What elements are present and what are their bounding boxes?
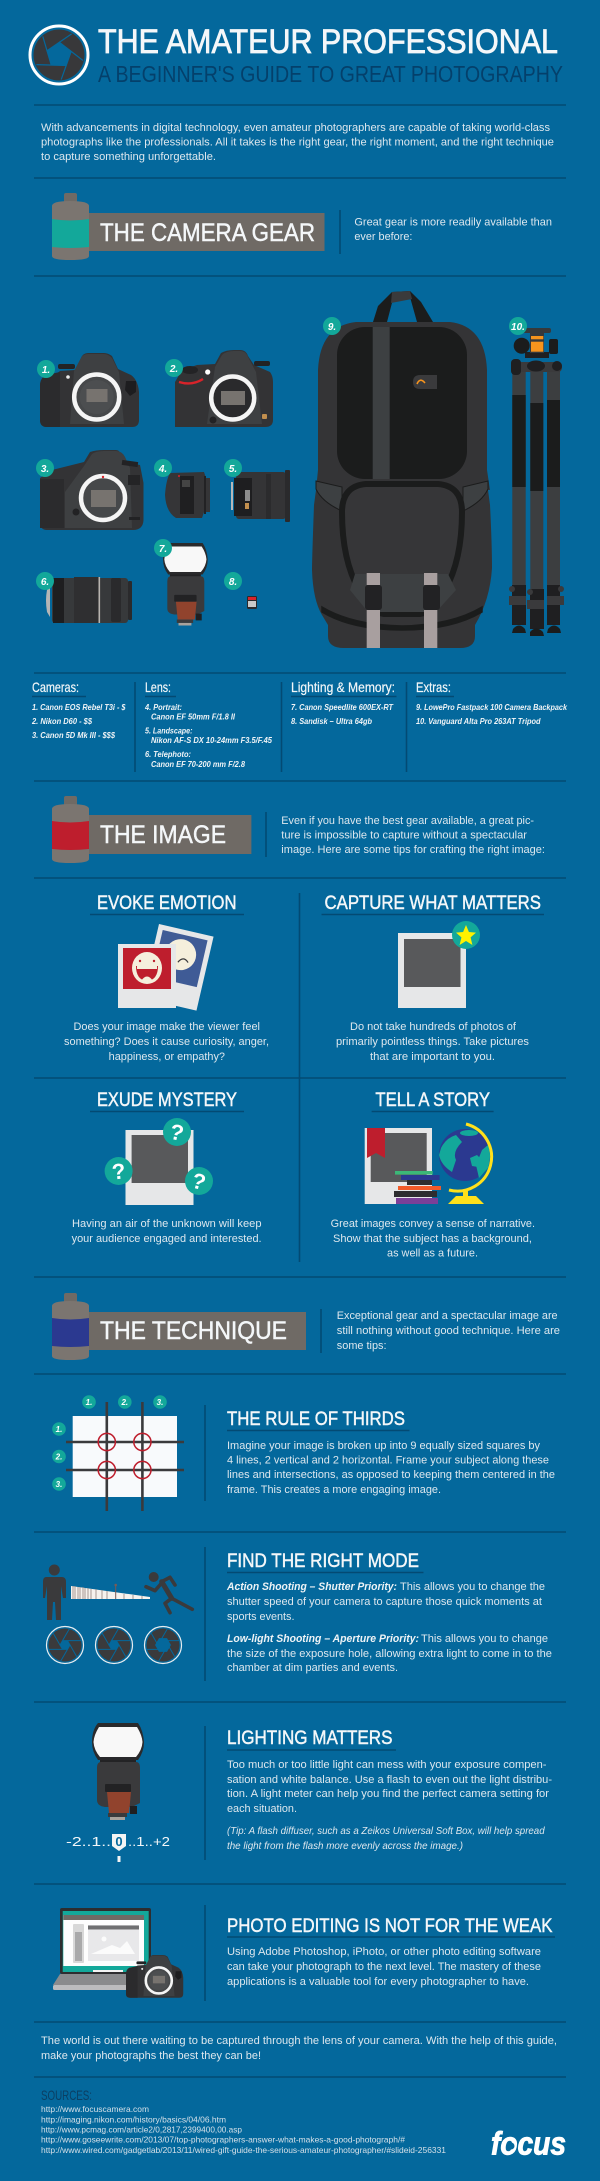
exposure scale: ..1..+2 xyxy=(128,1834,170,1849)
gear list: lens: 5. Landscape: xyxy=(145,726,193,736)
banner: the technique xyxy=(88,1312,306,1350)
intro text xyxy=(41,122,554,163)
gear list: lens: 6. Telephoto: xyxy=(145,750,191,759)
exposure scale: 0 xyxy=(115,1834,123,1849)
section description xyxy=(354,216,552,243)
tripod 10 xyxy=(509,328,564,636)
text block: lighting matters: each situation. xyxy=(227,1803,297,1815)
tripod legs xyxy=(512,362,560,594)
icon: laptop and camera xyxy=(53,1908,183,1998)
focus logo: focus xyxy=(491,2126,566,2162)
icon: polaroid with question marks: ? xyxy=(168,1119,186,1146)
icon: polaroid, books and globe xyxy=(365,1124,492,1204)
gear list: lens: Canon EF 50mm F/1.8 II xyxy=(151,712,236,722)
section description: image. Here are some tips for crafting the right image: xyxy=(281,844,545,856)
text block: find the right mode: sports events. xyxy=(227,1611,294,1623)
text block: lighting matters: tion. A light meter can help you find the perfect camera setting for xyxy=(227,1788,549,1800)
text block: photo editing xyxy=(227,1915,555,1988)
chart: rule of thirds grid: 1. xyxy=(86,1398,92,1407)
sources: http://imaging.nikon.com/history/basics/04/06.htm xyxy=(41,2116,226,2124)
text block: lighting matters: sation and white balance. Use a flash to even out the light distribu- xyxy=(227,1774,552,1786)
camera 3 xyxy=(40,450,144,530)
panel: tell a story xyxy=(331,1089,535,1260)
intro text: With advancements in digital technology, even amateur photographers are capable of taking world-class xyxy=(41,122,550,134)
sources: http://www.goseewrite.com/2013/07/top-photographers-answer-what-makes-a-good-photograph/# xyxy=(41,2136,405,2145)
backpack logo tag xyxy=(413,375,437,389)
heading: CAPTURE WHAT MATTERS xyxy=(324,892,541,914)
gear list: extras: Extras: xyxy=(416,679,451,695)
gear list: lens: Lens: xyxy=(145,679,171,695)
section header: the image xyxy=(52,796,545,863)
gear list: lighting and memory: Lighting & Memory: xyxy=(291,679,395,695)
heading: the camera gear: THE CAMERA GEAR xyxy=(100,219,315,247)
gear list: extras: 10. Vanguard Alta Pro 263AT Tripod xyxy=(416,717,542,726)
icon: polaroid with question marks xyxy=(105,1118,213,1205)
banner: the image xyxy=(88,815,251,854)
icon: laptop xyxy=(53,1908,151,1990)
heading: EXUDE MYSTERY xyxy=(97,1089,237,1111)
section description: ever before: xyxy=(354,231,412,243)
heading: the image: THE IMAGE xyxy=(100,821,226,849)
text block: lighting matters: the light from the flash more evenly across the image.) xyxy=(227,1841,463,1852)
text block: find the right mode: shutter speed of your camera to capture those quick moments at xyxy=(227,1596,542,1608)
gear number badges: 4. xyxy=(158,464,167,475)
banner: the camera gear xyxy=(88,213,324,251)
icon: shutter priority figures xyxy=(43,1564,192,1664)
gear list: lighting and memory xyxy=(291,679,396,726)
text block: the rule of thirds: frame. This creates a more engaging image. xyxy=(227,1484,441,1496)
gear list: lens: Nikon AF-S DX 10-24mm F3.5/F.45 xyxy=(151,736,273,745)
description: as well as a future. xyxy=(387,1248,478,1260)
icon: flash with exposure scale xyxy=(66,1723,170,1862)
section description: ture is impossible to capture without a spectacular xyxy=(281,830,527,842)
text block: the rule of thirds: 4 lines, 2 vertical and 2 horizontal. Frame your subject along these xyxy=(227,1454,549,1466)
section description: Even if you have the best gear available, a great pic- xyxy=(281,815,534,827)
gear list: extras: 9. LowePro Fastpack 100 Camera Backpack xyxy=(416,703,567,712)
icon: polaroid with question marks: ? xyxy=(189,1168,209,1195)
gear list: extras xyxy=(416,679,567,726)
gear list: lens: Canon EF 70-200 mm F/2.8 xyxy=(151,760,246,769)
lens 6 xyxy=(46,577,132,623)
description: that are important to you. xyxy=(370,1051,495,1063)
backpack grey panel xyxy=(350,574,456,612)
gear list: cameras: 1. Canon EOS Rebel T3i - $ xyxy=(32,703,126,712)
chart: rule of thirds grid xyxy=(52,1395,184,1511)
sources: http://www.wired.com/gadgetlab/2013/11/wired-gift-guide-the-serious-amateur-photographer/#slideid-256331 xyxy=(41,2146,446,2155)
icon: polaroid with question marks: ? xyxy=(111,1158,127,1185)
chart: rule of thirds grid: 2. xyxy=(55,1452,62,1462)
sources xyxy=(41,2087,446,2155)
gear list: lens: 4. Portrait: xyxy=(144,703,182,712)
description: happiness, or empathy? xyxy=(109,1051,225,1063)
panel: exude mystery xyxy=(72,1089,262,1245)
section description xyxy=(337,1310,560,1352)
text block: the rule of thirds xyxy=(227,1408,555,1496)
gear list: cameras: Cameras: xyxy=(32,679,79,695)
lens 4 xyxy=(165,472,210,518)
camera 2 xyxy=(175,350,273,427)
icon: aperture 1 xyxy=(46,1626,84,1664)
gear number badges: 10. xyxy=(511,322,525,333)
backpack buckles and straps xyxy=(365,573,440,648)
exposure scale: -2..1.. xyxy=(66,1834,111,1849)
sources: http://www.focuscamera.com xyxy=(41,2105,149,2114)
gear list: lighting and memory: 7. Canon Speedlite 600EX-RT xyxy=(291,703,394,712)
backpack front flap xyxy=(342,484,462,614)
section header: the technique xyxy=(52,1293,560,1360)
text block: find the right mode: Action Shooting – Shutter Priority: xyxy=(226,1581,397,1593)
text block: find the right mode: This allows you to change xyxy=(421,1633,548,1645)
icon: polaroid with star xyxy=(398,921,480,1008)
description: Great images convey a sense of narrative. xyxy=(331,1218,535,1230)
heading: the technique: THE TECHNIQUE xyxy=(100,1317,287,1345)
heading: EVOKE EMOTION xyxy=(97,892,236,914)
icon: aperture 3 xyxy=(144,1626,182,1664)
text block: find the right mode: Low-light Shooting – Aperture Priority: xyxy=(227,1633,419,1645)
text block: the rule of thirds: Imagine your image is broken up into 9 equally sized squares by xyxy=(227,1440,541,1452)
description: Show that the subject has a background, xyxy=(333,1233,532,1245)
icon: flash xyxy=(92,1723,144,1820)
closing text xyxy=(41,2035,557,2062)
icon: film canister teal xyxy=(52,193,89,260)
section description: still nothing without good technique. Here are xyxy=(337,1325,560,1337)
backpack black panel xyxy=(337,327,467,479)
backpack handle xyxy=(373,291,433,322)
backpack lower body xyxy=(312,478,492,648)
section description: Great gear is more readily available than xyxy=(354,216,552,228)
text block: find the right mode: chamber at dim parties and events. xyxy=(227,1662,398,1674)
text block: find the right mode: the size of the exposure hole, allowing extra light to come in to the xyxy=(227,1648,552,1660)
gear list: lighting and memory: 8. Sandisk – Ultra 64gb xyxy=(291,717,372,726)
gear list: cameras xyxy=(31,679,126,740)
text block: find the right mode: FIND THE RIGHT MODE xyxy=(227,1550,419,1572)
intro text: to capture something unforgettable. xyxy=(41,151,216,163)
chart: rule of thirds grid: 3. xyxy=(157,1398,163,1407)
section description: Exceptional gear and a spectacular image are xyxy=(337,1310,558,1322)
icon: standing person xyxy=(43,1564,66,1620)
backpack strap xyxy=(373,327,390,479)
chart: shutter speed wedge xyxy=(71,1584,150,1599)
backpack 9 xyxy=(312,291,492,648)
flash 7 xyxy=(163,543,208,626)
text block: lighting matters xyxy=(227,1727,552,1852)
tripod feet xyxy=(509,585,564,636)
memory card 8 xyxy=(247,596,257,609)
text block: photo editing: PHOTO EDITING IS NOT FOR THE WEAK xyxy=(227,1915,552,1937)
text block: find the right mode xyxy=(226,1550,552,1674)
gear list: lens xyxy=(144,679,273,769)
icon: aperture logo xyxy=(30,26,88,84)
gear number badges: 8. xyxy=(229,577,237,588)
text block: lighting matters: LIGHTING MATTERS xyxy=(227,1727,392,1749)
description: Do not take hundreds of photos of xyxy=(350,1021,516,1033)
text block: find the right mode: This allows you to change the xyxy=(400,1581,545,1593)
description: Having an air of the unknown will keep xyxy=(72,1218,262,1230)
tripod head xyxy=(511,328,562,397)
backpack upper body xyxy=(316,322,490,490)
icon: film canister red xyxy=(52,796,89,863)
description: your audience engaged and interested. xyxy=(72,1233,262,1245)
text block: lighting matters: Too much or too little light can mess with your exposure compen- xyxy=(227,1759,547,1771)
gear list: cameras: 3. Canon 5D Mk III - $$$ xyxy=(32,731,116,740)
panel: evoke emotion xyxy=(64,892,269,1063)
text block: photo editing: applications is a valuable tool for every photographer to have. xyxy=(227,1976,529,1988)
gear number badges: 9. xyxy=(328,322,336,333)
section header: the camera gear xyxy=(52,193,552,260)
section description: some tips: xyxy=(337,1340,386,1352)
gear number badges: 5. xyxy=(229,464,237,475)
panel: capture what matters xyxy=(322,892,544,1063)
gear number badges: 6. xyxy=(41,577,49,588)
sources: SOURCES: xyxy=(41,2087,92,2103)
text block: lighting matters: (Tip: A flash diffuser, such as a Zeikos Universal Soft Box, will help spread xyxy=(227,1826,546,1837)
icon: small camera xyxy=(126,1955,183,1998)
description xyxy=(64,1021,269,1063)
sources: http://www.pcmag.com/article2/0,2817,2399400,00.asp xyxy=(41,2126,242,2135)
title: THE AMATEUR PROFESSIONAL xyxy=(98,23,558,61)
description xyxy=(336,1021,529,1063)
icon: running person xyxy=(146,1572,192,1613)
description: something? Does it cause curiosity, anger, xyxy=(64,1036,269,1048)
text block: the rule of thirds: THE RULE OF THIRDS xyxy=(227,1408,405,1430)
closing text: The world is out there waiting to be captured through the lens of your camera. With the help of this guide, xyxy=(41,2035,557,2047)
gear number badges: 3. xyxy=(41,464,49,475)
gear number badges: 1. xyxy=(42,365,50,376)
backpack side straps xyxy=(316,481,342,511)
description: primarily pointless things. Take pictures xyxy=(336,1036,529,1048)
closing text: make your photographs the best they can be! xyxy=(41,2050,261,2062)
gear number badges: 7. xyxy=(159,544,167,555)
chart: rule of thirds grid: 3. xyxy=(56,1480,62,1489)
section description xyxy=(281,815,545,856)
icon: sad polaroid xyxy=(142,924,214,1011)
heading: TELL A STORY xyxy=(375,1089,490,1111)
gear number badges: 2. xyxy=(169,364,178,375)
chart: rule of thirds grid: 2. xyxy=(120,1398,128,1407)
exposure scale xyxy=(66,1834,170,1862)
camera 1 xyxy=(40,353,139,427)
description: Does your image make the viewer feel xyxy=(74,1021,260,1033)
description xyxy=(72,1218,262,1245)
description xyxy=(331,1218,535,1260)
icon: film canister blue xyxy=(52,1293,89,1360)
icon: happy polaroid xyxy=(118,944,176,1008)
text block: photo editing: can take your photograph to the next level. The mastery of these xyxy=(227,1961,541,1973)
backpack lower band xyxy=(322,607,482,630)
intro text: photographs like the professionals. All it takes is the right gear, the right moment, and the right technique xyxy=(41,136,554,148)
gear list: cameras: 2. Nikon D60 - $$ xyxy=(31,717,93,726)
chart: rule of thirds grid: 1. xyxy=(56,1425,62,1434)
text block: photo editing: Using Adobe Photoshop, iPhoto, or other photo editing software xyxy=(227,1946,541,1958)
text block: the rule of thirds: lines and intersections, as opposed to keeping them centered in the xyxy=(227,1469,555,1481)
lens 5 xyxy=(231,470,290,522)
header: logo and title xyxy=(30,23,563,87)
icon: aperture 2 xyxy=(96,1626,132,1664)
gear number badges xyxy=(36,317,527,590)
